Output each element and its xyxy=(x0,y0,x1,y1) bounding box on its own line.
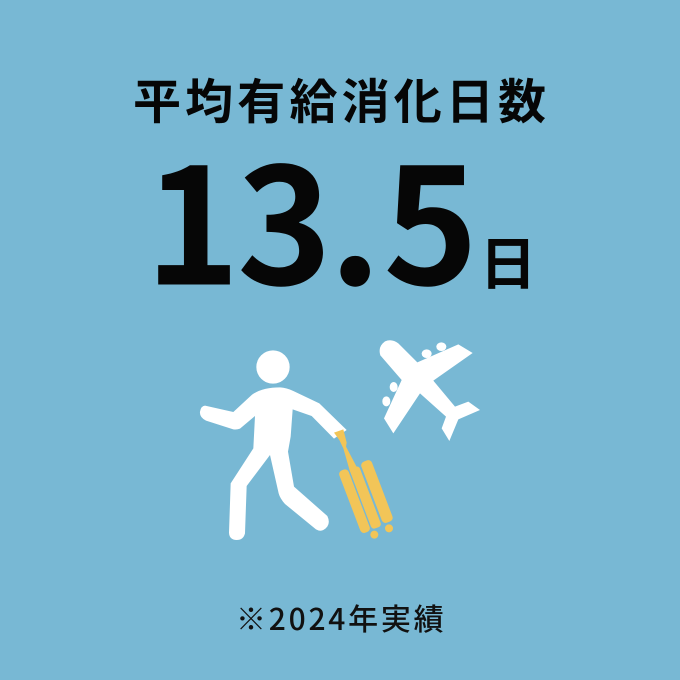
icon: airplane xyxy=(380,340,480,441)
unit: 日 xyxy=(480,219,536,301)
icon: suitcase xyxy=(334,429,394,539)
figure: 13.5 days xyxy=(145,98,536,332)
big number: 1 xyxy=(145,98,242,332)
icon: person xyxy=(200,350,347,540)
big number: 3.5 xyxy=(237,98,480,332)
footnote: ※2024年実績 xyxy=(236,595,446,639)
title: 平均有給消化日数 xyxy=(133,62,550,132)
illustration: traveller and plane xyxy=(200,340,480,540)
